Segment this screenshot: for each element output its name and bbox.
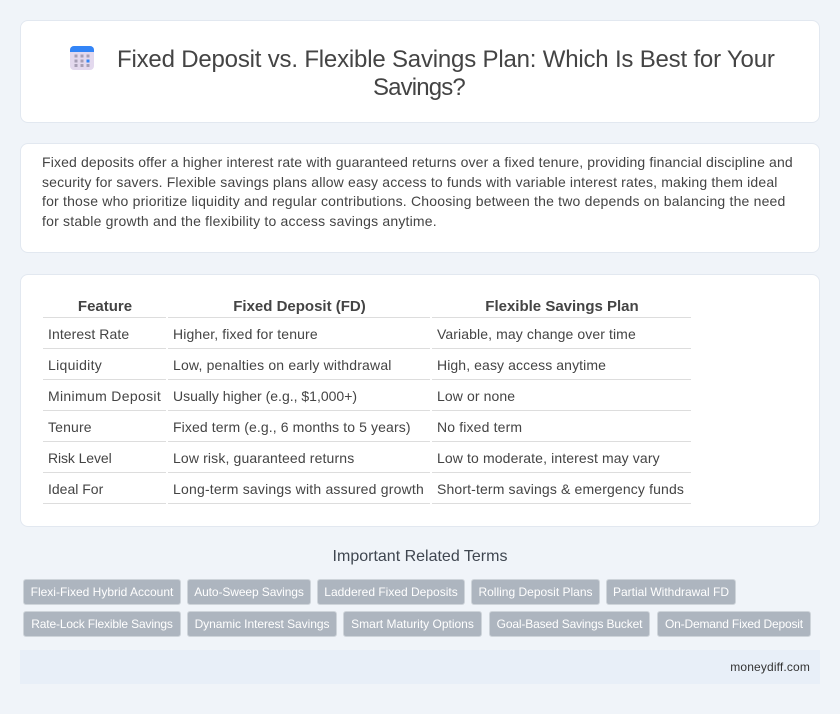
- icon: calendar: [70, 46, 94, 70]
- chip: [657, 611, 811, 637]
- table header: Feature: [78, 298, 132, 315]
- row: ideal for: [48, 481, 684, 497]
- chip: [471, 579, 600, 605]
- table header: Fixed Deposit (FD): [233, 298, 366, 315]
- text block: introduction: Fixed deposits offer a higher interest rate with guaranteed returns over a fixed tenure, providing financial discipline and: [42, 154, 793, 170]
- footer: source: moneydiff.com: [730, 660, 810, 674]
- chip: Rolling Deposit Plans: [478, 585, 593, 599]
- row: minimum deposit: Low or none: [437, 388, 515, 404]
- row: liquidity: High, easy access anytime: [437, 357, 606, 373]
- panel: comparison table: [20, 274, 820, 527]
- chip: Goal-Based Savings Bucket: [497, 617, 642, 631]
- chip: [489, 611, 650, 637]
- chip: Flexi-Fixed Hybrid Account: [31, 585, 173, 599]
- text block: introduction: for those who prioritize liquidity and regular contributions. Choosing between the two depends on balancing the need: [42, 193, 786, 209]
- table: comparison: [43, 298, 691, 504]
- title: Savings?: [373, 74, 465, 101]
- text block: introduction: security for savers. Flexible savings plans allow easy access to funds with variable interest rates, making them ideal: [42, 174, 778, 190]
- table header: Flexible Savings Plan: [485, 298, 639, 315]
- chip: [23, 611, 181, 637]
- row: liquidity: [48, 357, 606, 373]
- chip: Smart Maturity Options: [351, 617, 474, 631]
- chip: [23, 579, 181, 605]
- footer bar: [20, 650, 820, 684]
- title: [117, 46, 775, 101]
- chip: [317, 579, 465, 605]
- heading: related terms: Important Related Terms: [333, 548, 507, 565]
- row: ideal for: Long-term savings with assured growth: [173, 481, 424, 497]
- row: interest rate: Variable, may change over time: [437, 326, 636, 342]
- chip: Partial Withdrawal FD: [613, 585, 729, 599]
- panel: header: [20, 20, 820, 123]
- row: interest rate: Higher, fixed for tenure: [173, 326, 318, 342]
- row: interest rate: [48, 326, 636, 342]
- table header: [78, 298, 639, 315]
- chip: [187, 579, 311, 605]
- row: ideal for: Ideal For: [48, 481, 103, 497]
- row: risk level: Low risk, guaranteed returns: [173, 450, 354, 466]
- row: liquidity: Liquidity: [48, 357, 102, 373]
- row: interest rate: Interest Rate: [48, 326, 129, 342]
- chip: [187, 611, 337, 637]
- row: minimum deposit: Usually higher (e.g., $1,000+): [173, 388, 357, 404]
- chip: [606, 579, 736, 605]
- chip: Auto-Sweep Savings: [194, 585, 304, 599]
- row: tenure: Tenure: [48, 419, 92, 435]
- chip: Dynamic Interest Savings: [195, 617, 329, 631]
- row: risk level: Low to moderate, interest may vary: [437, 450, 660, 466]
- text block: introduction: for stable growth and the flexibility to access savings anytime.: [42, 213, 437, 229]
- row: tenure: [48, 419, 522, 435]
- related terms chips: [23, 579, 811, 637]
- row: tenure: No fixed term: [437, 419, 522, 435]
- text block: introduction: [42, 154, 793, 229]
- chip: [343, 611, 482, 637]
- row: minimum deposit: Minimum Deposit: [48, 388, 161, 404]
- panel: introduction: [20, 143, 820, 253]
- row: risk level: [48, 450, 660, 466]
- title: Fixed Deposit vs. Flexible Savings Plan: Which Is Best for Your: [117, 46, 775, 73]
- chip: On-Demand Fixed Deposit: [665, 617, 803, 631]
- row: minimum deposit: [48, 388, 515, 404]
- row: tenure: Fixed term (e.g., 6 months to 5 years): [173, 419, 411, 435]
- row: risk level: Risk Level: [48, 450, 112, 466]
- row: liquidity: Low, penalties on early withdrawal: [173, 357, 392, 373]
- chip: Laddered Fixed Deposits: [324, 585, 458, 599]
- chip: Rate-Lock Flexible Savings: [31, 617, 173, 631]
- row: ideal for: Short-term savings & emergency funds: [437, 481, 684, 497]
